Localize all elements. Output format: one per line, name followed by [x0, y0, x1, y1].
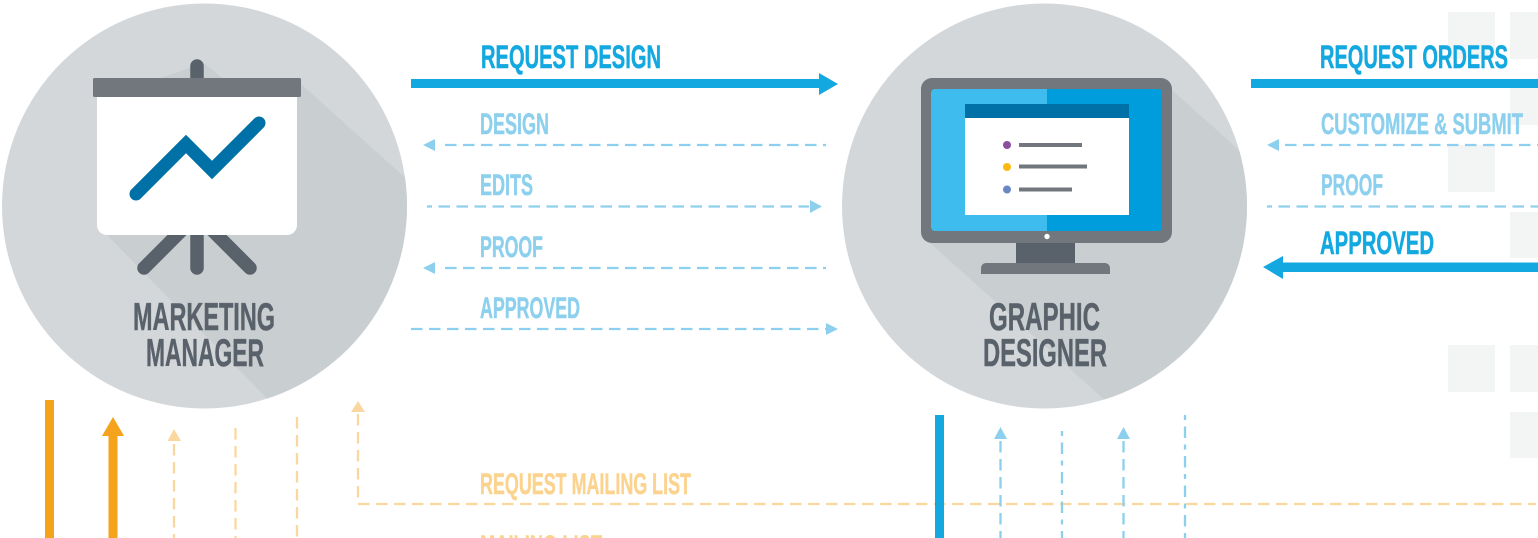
arrow: proof: PROOF — [480, 231, 543, 264]
arrow: blue dashed up 1 — [994, 427, 1007, 538]
icon: monitor — [921, 78, 1172, 274]
heading: marketing manager: MANAGER — [146, 332, 264, 375]
heading: marketing manager — [133, 296, 275, 375]
arrow: orange dashed up — [168, 429, 181, 538]
arrow: request orders — [1251, 39, 1538, 88]
line: blue dashed 1 — [1061, 431, 1063, 538]
arrow: customize and submit — [1267, 108, 1538, 151]
arrow: request mailing list — [351, 401, 1536, 504]
arrow: approved — [411, 292, 838, 335]
arrow: approved: APPROVED — [480, 292, 580, 325]
arrow: proof to customer: PROOF — [1321, 169, 1383, 202]
heading: marketing manager: MARKETING — [133, 296, 275, 339]
heading: graphic designer — [983, 296, 1107, 375]
arrow: edits: EDITS — [480, 169, 533, 202]
arrow: proof — [423, 231, 826, 274]
arrow: approved by customer — [1263, 225, 1538, 279]
arrow: orange solid line — [45, 400, 54, 538]
panel: graphic designer — [842, 4, 1260, 420]
heading: graphic designer: GRAPHIC — [989, 296, 1100, 339]
arrow: blue dashed up 2 — [1117, 427, 1130, 538]
arrow: request design: REQUEST DESIGN — [481, 39, 661, 75]
arrow: orange solid up arrow — [102, 417, 124, 538]
arrow: approved by customer: APPROVED — [1320, 225, 1434, 261]
line: blue dashed 2 — [1184, 415, 1186, 538]
panel: marketing manager — [2, 4, 420, 420]
arrow: edits — [427, 169, 822, 213]
icon: presentation board — [93, 66, 301, 268]
arrow: design: DESIGN — [480, 108, 549, 141]
arrow: blue solid line — [935, 415, 944, 538]
line: orange dashed 2 — [296, 417, 298, 538]
arrow: request design — [411, 39, 838, 95]
arrow: request mailing list: REQUEST MAILING LIST — [480, 468, 691, 501]
background squares — [1448, 12, 1538, 458]
arrow: design — [423, 108, 826, 151]
line: orange dashed 1 — [234, 428, 237, 538]
heading: graphic designer: DESIGNER — [983, 332, 1107, 375]
